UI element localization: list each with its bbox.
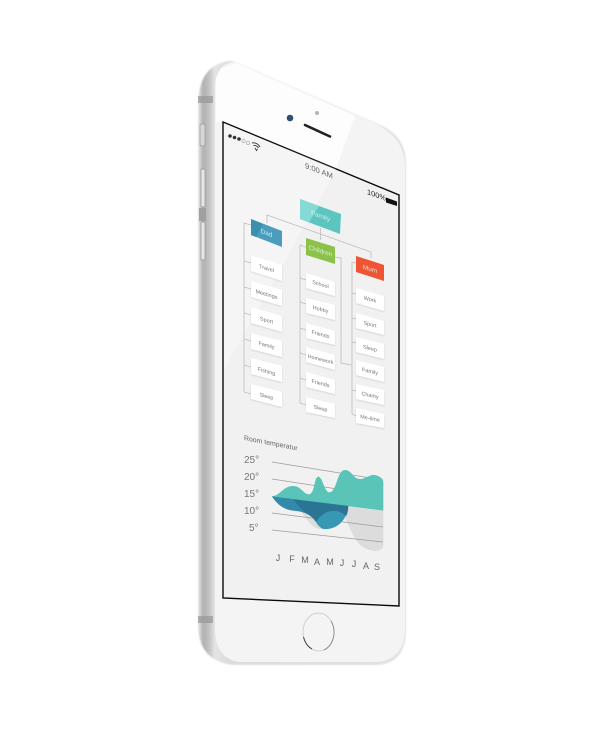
row: School: [306, 273, 335, 296]
row: Sleep: Sleep: [363, 344, 377, 354]
y axis labels: [244, 455, 259, 534]
row: Work: Work: [364, 295, 376, 305]
row: Meetings: [251, 281, 282, 306]
side tab: [199, 208, 206, 221]
row: Sport: Sport: [260, 316, 273, 326]
x axis labels: J: [340, 558, 344, 568]
signal dots: [228, 134, 250, 145]
x axis labels: M: [326, 557, 334, 567]
row: Travel: Travel: [259, 264, 274, 274]
home button: [303, 613, 334, 651]
volume up button: [201, 169, 205, 207]
row: Friends: [306, 372, 335, 394]
box: Mum: Mum: [363, 264, 378, 275]
antenna band bottom: [198, 616, 213, 623]
row: Sleep: [306, 397, 335, 418]
light bump: [316, 511, 346, 529]
y axis labels: 5°: [249, 523, 259, 534]
chart title: Room temperatur: [244, 435, 298, 453]
row: Sleep: Sleep: [314, 404, 327, 414]
column: Children: [306, 273, 335, 418]
y axis labels: 15°: [244, 489, 259, 500]
screen glare: [224, 123, 336, 370]
x axis labels: S: [374, 562, 380, 572]
row: Fishing: [251, 358, 282, 382]
column: Mum: [356, 288, 384, 428]
battery percent: 100%: [367, 187, 386, 203]
row: Fishing: Fishing: [258, 367, 275, 377]
time: 9:00 AM: [305, 161, 333, 181]
row: Hobby: Hobby: [313, 305, 329, 315]
teal area: [272, 470, 383, 511]
x axis labels: J: [352, 559, 356, 569]
x axis labels: J: [276, 553, 280, 563]
row: Friends: Friends: [312, 379, 330, 389]
row: Homework: [306, 347, 335, 370]
row: Travel: [251, 255, 282, 281]
grid lines: [272, 462, 383, 542]
row: Hobby: [306, 298, 335, 320]
row: Me-time: Me-time: [360, 414, 380, 424]
y axis labels: 20°: [244, 472, 259, 483]
x axis labels: A: [363, 561, 369, 571]
row: Meetings: Meetings: [256, 289, 278, 301]
row: Homework: Homework: [308, 354, 334, 366]
phone front face: [215, 62, 405, 662]
icon: battery: [386, 198, 397, 206]
box: Mum: [356, 256, 384, 281]
temperature chart: [244, 435, 383, 572]
speaker: [305, 125, 330, 136]
face highlight: [216, 63, 355, 169]
phone: [198, 61, 406, 665]
front camera: [287, 115, 293, 121]
volume down button: [201, 222, 205, 260]
antenna band top: [198, 96, 213, 103]
y axis labels: 25°: [244, 455, 259, 466]
row: Friends: Friends: [312, 330, 330, 340]
box: Dad: Dad: [261, 228, 273, 239]
x axis labels: [276, 553, 380, 572]
connector lines: [244, 215, 371, 416]
y axis labels: 10°: [244, 506, 259, 517]
x axis labels: M: [301, 555, 309, 565]
x axis labels: A: [314, 557, 320, 567]
row: Family: Family: [362, 367, 378, 377]
row: Family: Family: [259, 341, 275, 351]
x axis labels: F: [289, 554, 295, 564]
row: Sport: Sport: [364, 320, 377, 330]
row: Sleep: Sleep: [260, 392, 273, 402]
box: Family: [300, 199, 341, 234]
row: Sleep: [251, 384, 282, 407]
row: Friends: [306, 323, 335, 345]
sensor: [315, 111, 319, 115]
box: Children: [306, 238, 335, 264]
row: Charity: Charity: [361, 391, 379, 401]
row: Sport: [251, 307, 282, 332]
blue area: [272, 496, 348, 529]
screen: [223, 122, 399, 606]
box: Family: Family: [311, 210, 331, 224]
dark overlap: [293, 499, 348, 522]
box: Children: Children: [309, 244, 333, 259]
icon: wifi: [252, 143, 260, 150]
column: Dad: [251, 255, 282, 407]
box: Dad: [251, 219, 282, 247]
phone metal body: [198, 61, 406, 665]
row: School: School: [312, 280, 329, 290]
grey area: [293, 499, 383, 551]
row: Family: [251, 333, 282, 357]
mute switch: [200, 124, 205, 146]
org chart: [244, 199, 384, 428]
status bar: [228, 134, 397, 206]
